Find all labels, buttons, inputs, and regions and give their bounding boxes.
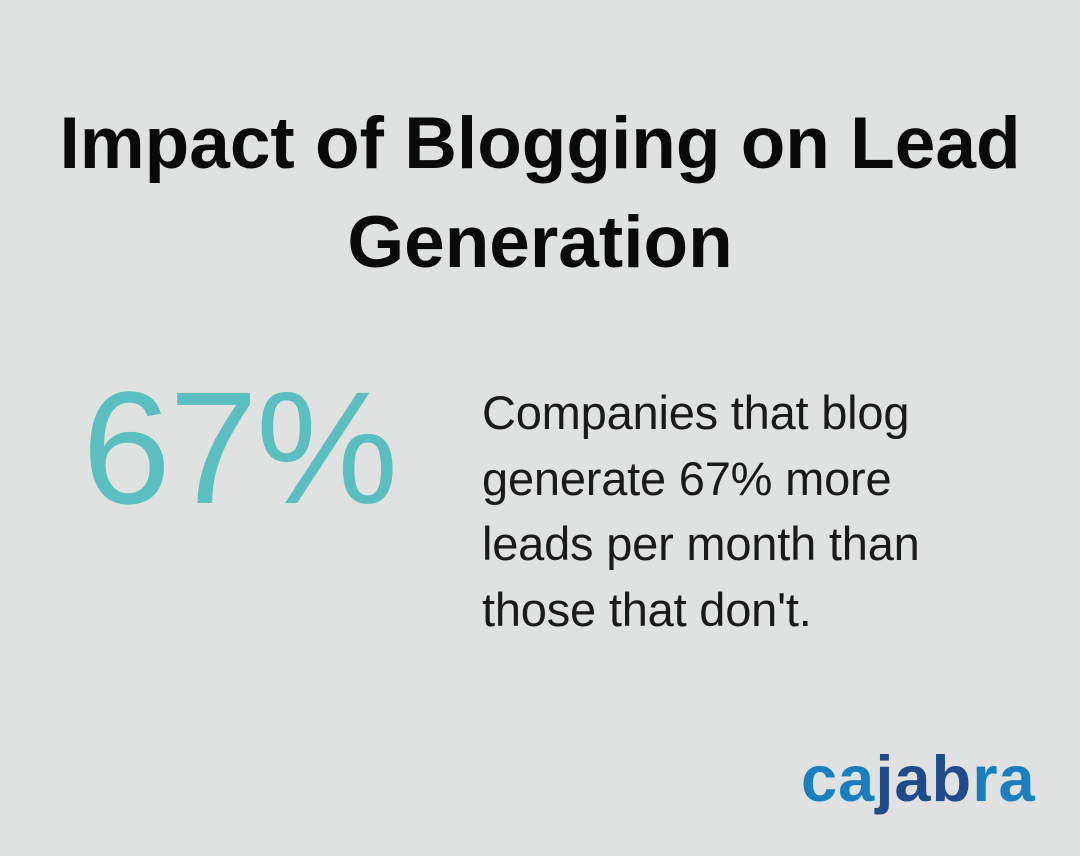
description text: leads per month than xyxy=(482,517,920,570)
big statistic: 67% xyxy=(82,358,396,537)
description text: those that don't. xyxy=(482,582,812,636)
title: Generation xyxy=(347,202,733,283)
description text: generate 67% more xyxy=(482,452,891,504)
description text xyxy=(482,386,920,636)
title xyxy=(59,103,1021,283)
title: Impact of Blogging on Lead xyxy=(59,103,1021,184)
logo: cajabra: cajabra xyxy=(801,742,1036,815)
description text: Companies that blog xyxy=(482,386,909,439)
